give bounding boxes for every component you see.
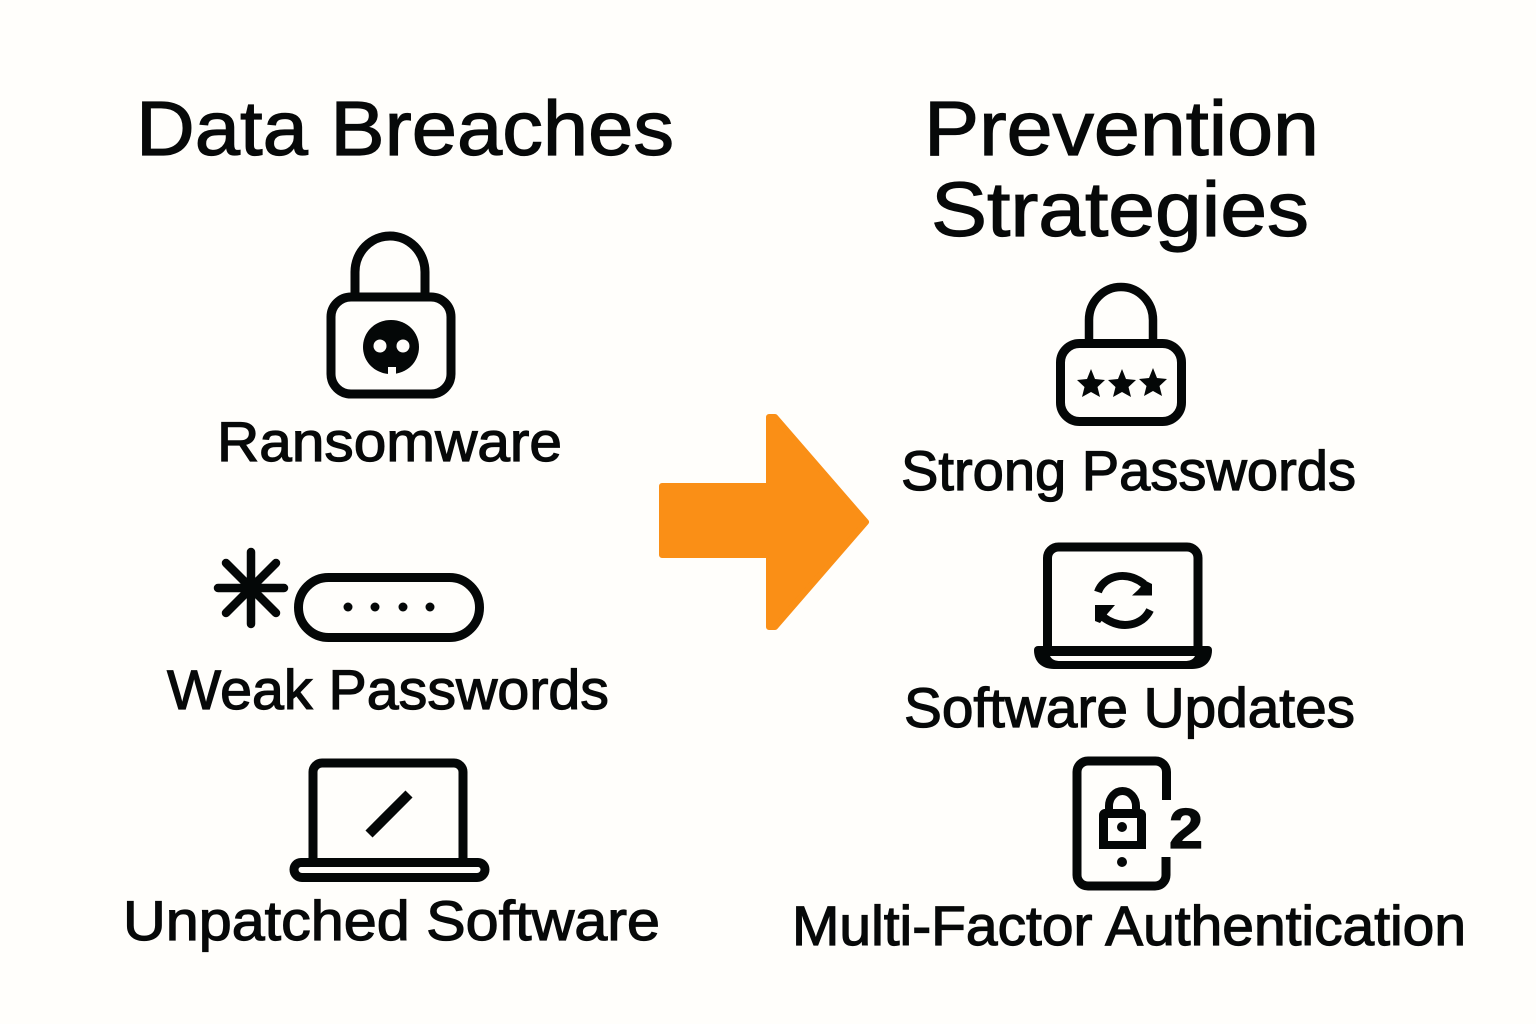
icon: padlock with stars [1060, 287, 1182, 422]
heading: data breaches: Data Breaches [136, 86, 674, 172]
label: multi-factor authentication: Multi-Factor Authentication [792, 894, 1466, 957]
panel: prevention strategies [792, 86, 1466, 957]
icon: padlock with skull [331, 236, 451, 394]
icon: asterisk and password field [218, 552, 480, 638]
panel: data breaches [123, 86, 674, 952]
heading: prevention strategies [924, 86, 1319, 253]
icon: phone with lock and two-factor number [1077, 761, 1203, 886]
icon: laptop with refresh arrows [1034, 547, 1212, 669]
label: ransomware: Ransomware [217, 410, 562, 473]
icon: unpatched laptop [294, 763, 485, 878]
heading: prevention strategies: Prevention [924, 86, 1319, 172]
label: strong passwords: Strong Passwords [901, 439, 1356, 502]
label: software updates: Software Updates [904, 676, 1355, 739]
label: unpatched software: Unpatched Software [123, 889, 660, 952]
heading: prevention strategies: Strategies [931, 167, 1309, 253]
icon: phone with lock and two-factor number: 2 [1169, 797, 1203, 861]
label: weak passwords: Weak Passwords [167, 658, 609, 721]
arrow: from breaches to prevention [662, 417, 866, 627]
